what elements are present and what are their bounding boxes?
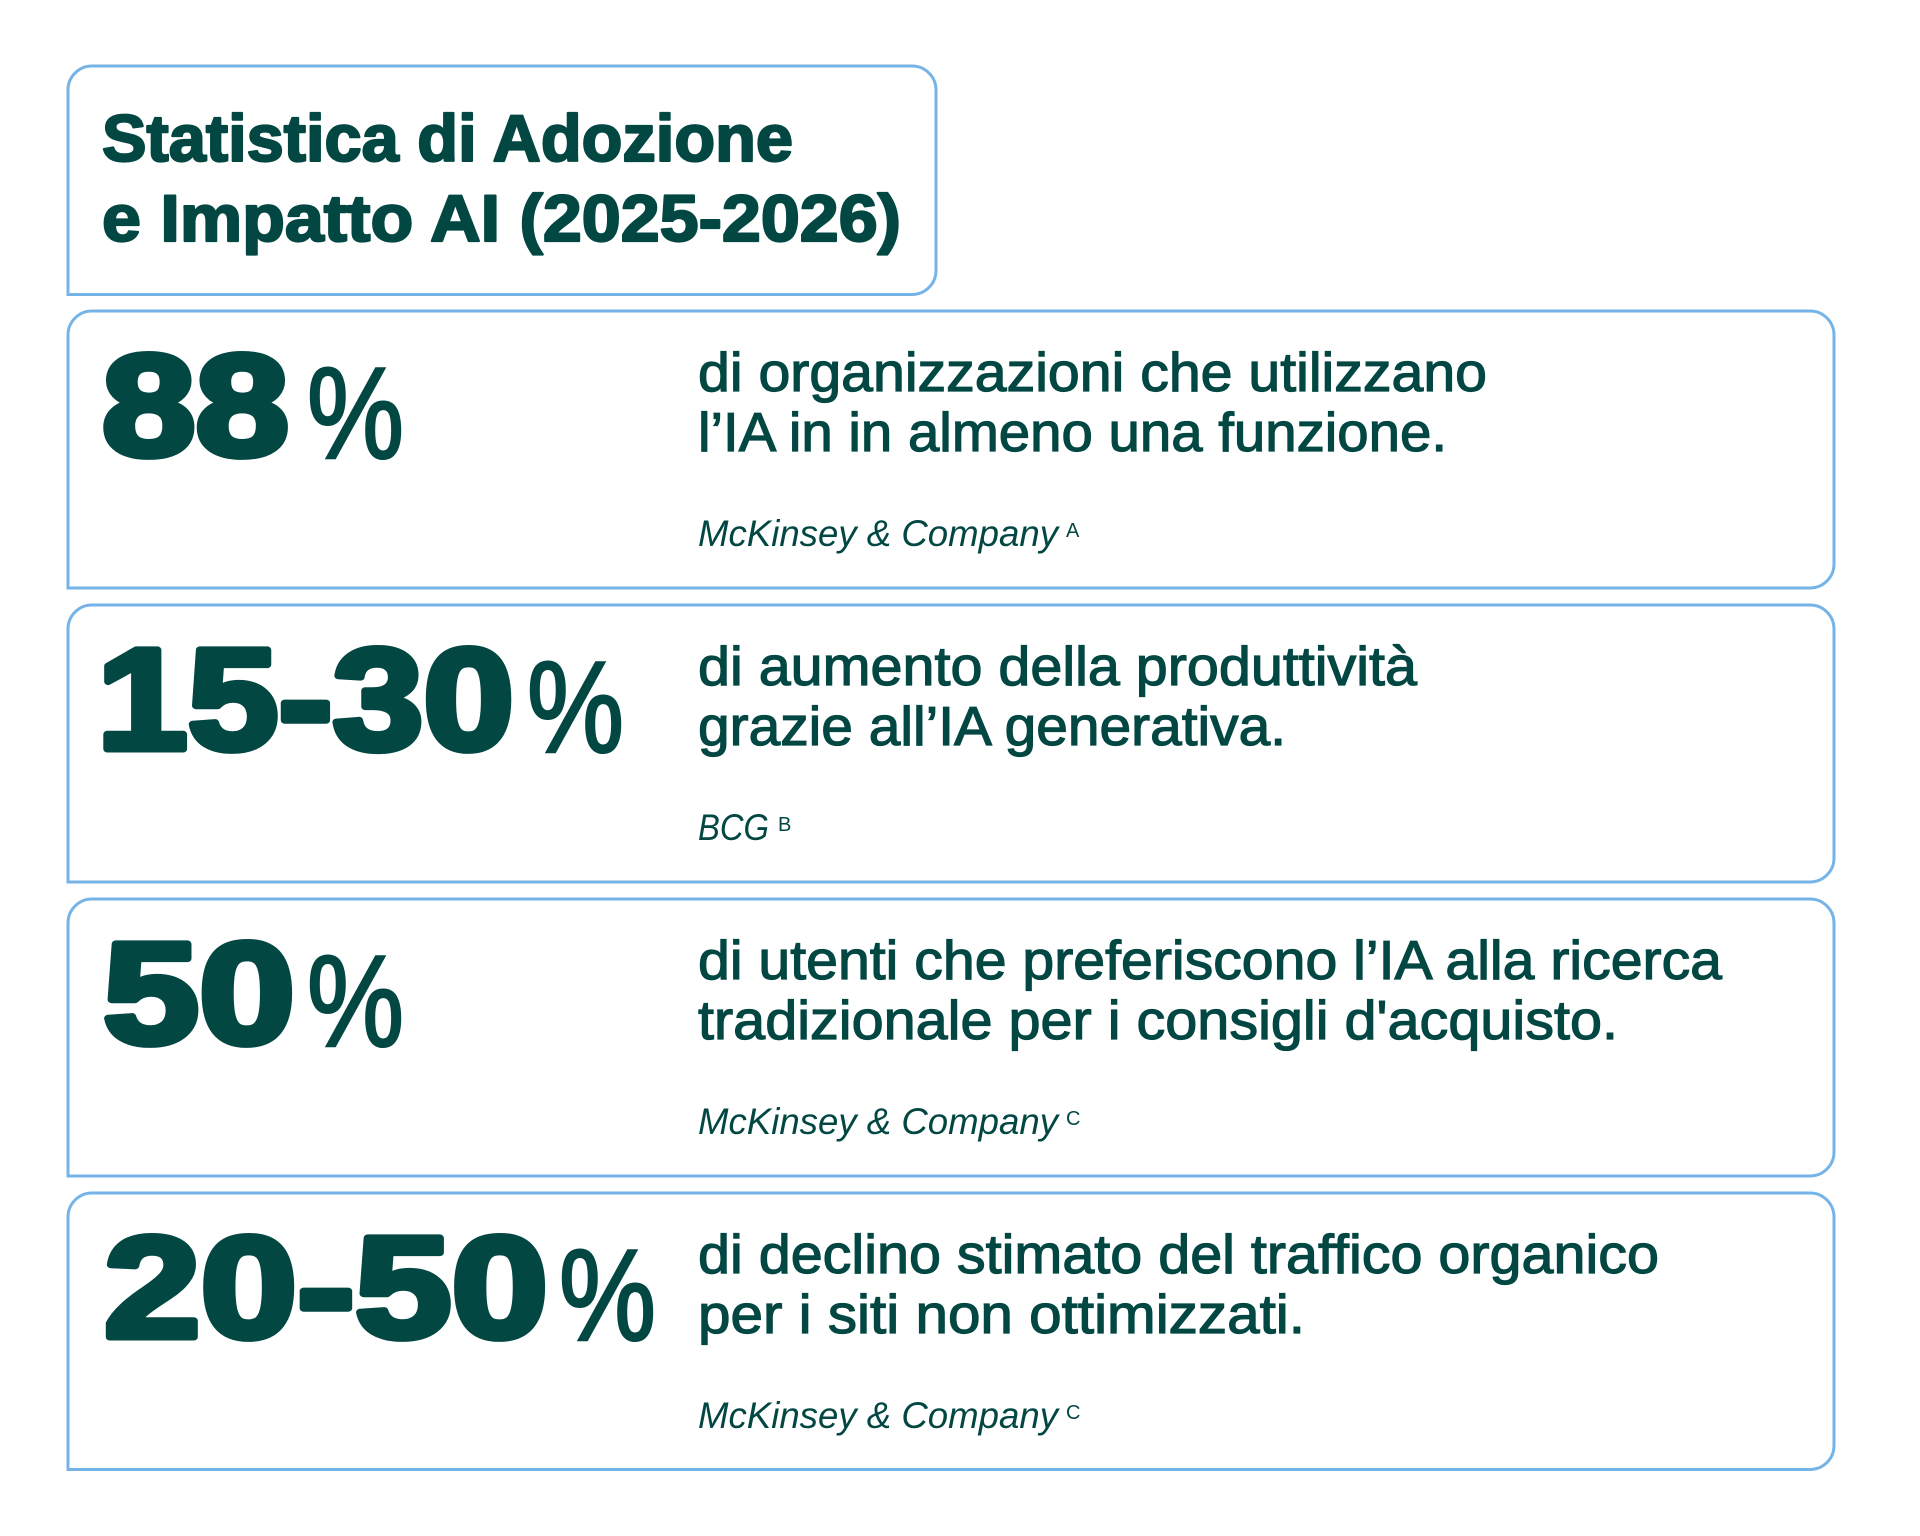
description — [698, 929, 1722, 1051]
heading: e Impatto AI (2025-2026) — [102, 181, 901, 255]
heading: Statistica di Adozione — [102, 101, 793, 175]
heading — [102, 101, 901, 255]
panel: statistic 15-30% — [68, 605, 1834, 882]
description — [698, 341, 1487, 463]
source: McKinsey & Company — [698, 513, 1060, 554]
description — [698, 1223, 1659, 1345]
panel: statistic 20-50% — [68, 1193, 1834, 1470]
description: di organizzazioni che utilizzano — [698, 341, 1487, 403]
panel: title — [68, 66, 936, 294]
big number: 88 — [102, 325, 289, 486]
source: BCG — [698, 807, 769, 848]
panel: statistic 50% — [68, 899, 1834, 1176]
source: C — [1066, 1402, 1080, 1424]
big number: 15-30 — [97, 619, 514, 780]
source: C — [1066, 1108, 1080, 1130]
description: tradizionale per i consigli d'acquisto. — [698, 989, 1618, 1051]
source: McKinsey & Company — [698, 1101, 1060, 1142]
percent sign: % — [307, 340, 404, 486]
description — [698, 635, 1417, 757]
percent sign: % — [307, 928, 404, 1074]
big number: 50 — [103, 913, 295, 1074]
panel: statistic 88% — [68, 311, 1834, 588]
description: di declino stimato del traffico organico — [698, 1223, 1659, 1285]
description: di aumento della produttività — [698, 635, 1417, 697]
description: di utenti che preferiscono l’IA alla ricerca — [698, 929, 1722, 991]
description: per i siti non ottimizzati. — [698, 1283, 1305, 1345]
description: grazie all’IA generativa. — [698, 695, 1286, 757]
source: A — [1066, 520, 1080, 542]
description: l’IA in in almeno una funzione. — [698, 401, 1447, 463]
big number: 20-50 — [104, 1207, 548, 1368]
source: B — [778, 814, 791, 836]
percent sign: % — [527, 634, 624, 780]
percent sign: % — [559, 1222, 656, 1368]
source: McKinsey & Company — [698, 1395, 1060, 1436]
